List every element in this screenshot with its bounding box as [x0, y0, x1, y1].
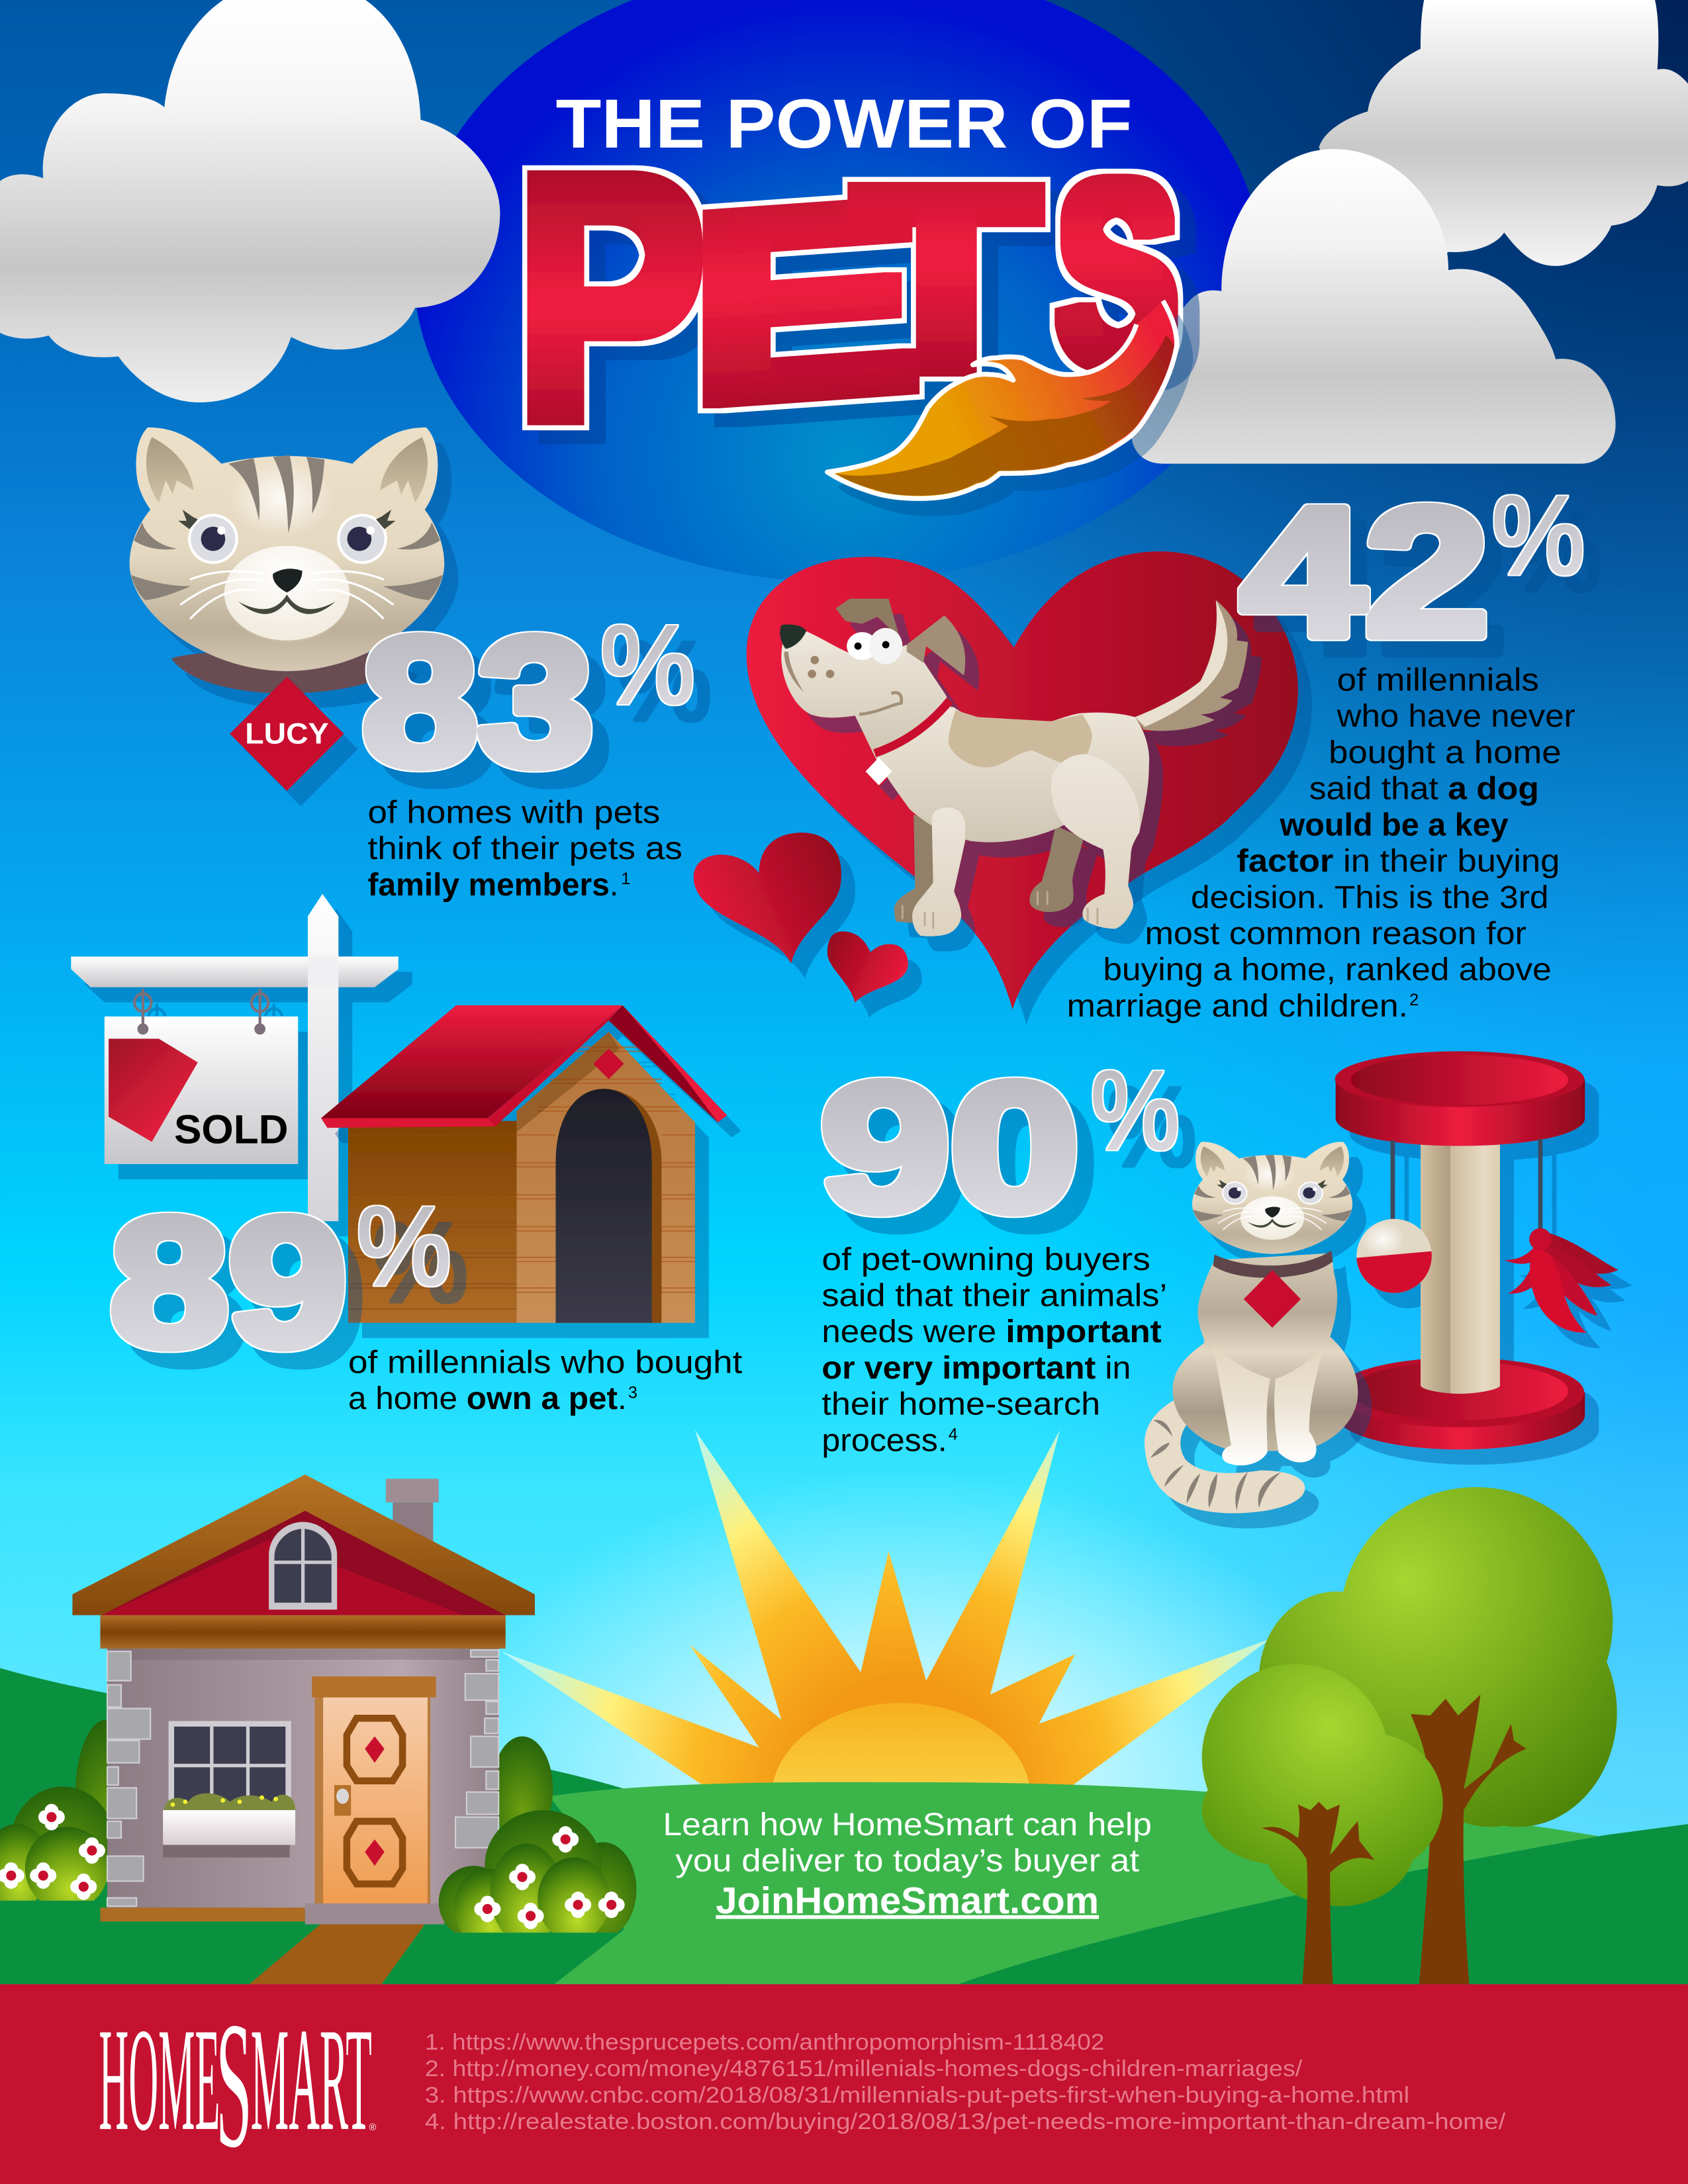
big tree: [1259, 1487, 1617, 1984]
logo: homesmart: S: [216, 1985, 252, 2184]
flower box: [163, 1794, 295, 1858]
title: pets lettering: T: [852, 134, 1041, 424]
infographic canvas: MART: [251, 1998, 372, 2161]
chimney: [386, 1479, 439, 1558]
blue title oval: [414, 0, 1263, 582]
stat 42 percent: [694, 470, 1585, 1024]
caption 42: marriage and children.: [1067, 988, 1408, 1024]
cloud: top left: [0, 0, 500, 402]
icon: tail on the S: [827, 300, 1177, 498]
number 89: 89: [110, 1180, 347, 1384]
number 90: 90: [820, 1045, 1080, 1249]
number 83: 83: [362, 600, 593, 803]
caption 83: family members.: [367, 867, 618, 903]
caption 83: of homes with pets: [367, 794, 660, 830]
cloud: front right: [1131, 149, 1616, 464]
caption 83: think of their pets as: [367, 831, 682, 866]
caption 89: 3: [628, 1383, 637, 1402]
source references: 1. https://www.thesprucepets.com/anthropomorphism-1118402: [425, 2030, 1104, 2055]
window: [169, 1721, 291, 1807]
title: pets lettering: E: [687, 146, 925, 458]
title: the power of: THE POWER OF: [555, 85, 1133, 163]
footer band: [0, 1984, 1688, 2184]
caption 90: process.: [821, 1422, 947, 1458]
stat 89 percent: [71, 894, 743, 1416]
logo: homesmart: HOME: [99, 1998, 220, 2161]
illustration: dog: [780, 599, 1248, 936]
big heart: [747, 551, 1298, 1009]
number 89: %: [357, 1184, 451, 1308]
illustration: sun: [501, 1430, 1270, 1892]
caption 42: of millennials: [1337, 662, 1539, 698]
lucy name tag: LUCY: [245, 717, 329, 750]
garden path: [250, 1925, 425, 1984]
number 42: %: [1491, 473, 1585, 598]
lucy name tag: [230, 677, 344, 791]
caption 42: most common reason for: [1145, 915, 1526, 951]
illustration: bushes behind house: [0, 1719, 553, 1911]
number 90: %: [1090, 1048, 1180, 1173]
number 89: [110, 1180, 451, 1384]
caption 90: said that their animals’: [821, 1277, 1167, 1313]
illustration: right trees: [1202, 1487, 1617, 1984]
illustration: scratching post: [1335, 1051, 1618, 1449]
front door: [312, 1676, 436, 1903]
caption 89: a home own a pet.: [348, 1381, 627, 1416]
caption 42: bought a home: [1329, 735, 1562, 770]
illustration: sitting cat: [1145, 1142, 1358, 1513]
source references: 3. https://www.cnbc.com/2018/08/31/millennials-put-pets-first-when-buying-a-home.html: [425, 2083, 1409, 2108]
number 42: [1241, 470, 1585, 674]
caption 90: needs were important: [821, 1314, 1162, 1349]
icon: lucy the cat head: [130, 428, 444, 694]
title: pets lettering: [517, 103, 1177, 491]
stat 90 percent: [820, 1045, 1618, 1513]
call to action: you deliver to today’s buyer at: [675, 1843, 1140, 1879]
caption 89: of millennials who bought: [348, 1344, 743, 1380]
caption 42: buying a home, ranked above: [1103, 952, 1552, 987]
small heart right: [827, 931, 908, 1003]
caption 90: or very important in: [821, 1350, 1131, 1386]
roof: [72, 1475, 535, 1615]
illustration: sold sign: [71, 894, 399, 1221]
call to action: JoinHomeSmart.com: [716, 1880, 1099, 1922]
caption 83: 1: [621, 870, 630, 888]
number 42: 42: [1241, 470, 1489, 674]
source references: [425, 2030, 1506, 2134]
caption 42: who have never: [1336, 698, 1575, 734]
toy ball: [1356, 1219, 1432, 1293]
caption 42: [1067, 662, 1575, 1024]
illustration: front bush with flowers: [439, 1810, 637, 1946]
source references: 4. http://realestate.boston.com/buying/2018/08/13/pet-needs-more-important-than-dream-home/: [425, 2109, 1506, 2134]
dormer window: [269, 1522, 337, 1610]
illustration: sold sign: SOLD: [174, 1107, 289, 1152]
title: pets lettering: P: [517, 103, 704, 491]
cloud: top right: [1319, 0, 1688, 279]
caption 42: 2: [1409, 991, 1419, 1009]
call to action: Learn how HomeSmart can help: [663, 1807, 1152, 1843]
corner stones: [107, 1650, 498, 1906]
caption 90: of pet-owning buyers: [821, 1242, 1150, 1277]
caption 42: would be a key: [1280, 807, 1509, 842]
logo: homesmart: [99, 1985, 377, 2184]
small tree: [1202, 1664, 1443, 1984]
feather toy: [1504, 1228, 1618, 1333]
caption 42: decision. This is the 3rd: [1191, 880, 1549, 915]
logo: homesmart: ®: [369, 2122, 377, 2133]
caption 42: factor in their buying: [1237, 843, 1560, 879]
caption 90: 4: [949, 1425, 958, 1443]
caption 90: their home-search: [821, 1387, 1100, 1422]
eave: [101, 1615, 506, 1649]
number 90: [820, 1045, 1180, 1249]
source references: 2. http://money.com/money/4876151/millenials-homes-dogs-children-marriages/: [425, 2056, 1303, 2081]
title: pets lettering: S: [1058, 129, 1177, 418]
call to action: [663, 1807, 1152, 1922]
small heart left: [694, 833, 841, 964]
wall: [107, 1649, 498, 1909]
number 83: [362, 600, 695, 803]
sun glow: [428, 1469, 1375, 2109]
stat 83 percent: [130, 428, 695, 903]
caption 42: said that a dog: [1309, 771, 1539, 807]
caption 90: [821, 1242, 1167, 1458]
caption 89: [348, 1344, 743, 1416]
collar: [171, 651, 404, 694]
rolling hills: [0, 1668, 1688, 1984]
caption 83: [367, 794, 682, 903]
illustration: house: [72, 1475, 535, 1925]
base and step: [101, 1903, 444, 1925]
number 83: %: [600, 602, 695, 727]
illustration: dog house: [321, 1005, 727, 1323]
